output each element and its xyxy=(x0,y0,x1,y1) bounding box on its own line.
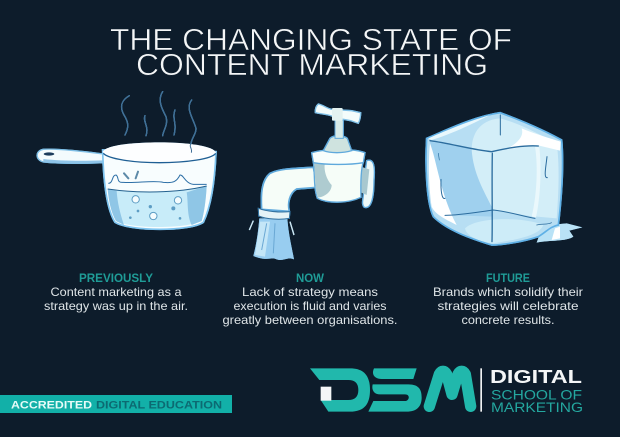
bubbles xyxy=(132,196,182,220)
water xyxy=(108,186,207,227)
accreditation banner xyxy=(0,395,232,413)
caption: now: execution is fluid and varies xyxy=(234,300,387,313)
spout band xyxy=(258,208,290,219)
caption: previously: strategy was up in the air. xyxy=(44,300,188,313)
caption: future xyxy=(433,272,583,327)
handle xyxy=(37,149,103,163)
tap handle xyxy=(315,104,361,123)
accreditation banner: DIGITAL EDUCATION xyxy=(96,400,222,412)
caption: future: FUTURE xyxy=(486,272,530,285)
caption: now: Lack of strategy means xyxy=(242,286,378,299)
spout xyxy=(261,167,317,211)
icon: tap xyxy=(249,104,374,260)
title xyxy=(110,22,512,82)
caption: previously: PREVIOUSLY xyxy=(79,272,153,285)
pot body xyxy=(103,150,216,229)
cube body xyxy=(426,113,563,245)
logo mark xyxy=(310,368,471,412)
puddle xyxy=(537,223,582,243)
logo wordmark: DIGITAL xyxy=(490,366,582,387)
logo wordmark: MARKETING xyxy=(491,399,583,415)
caption: future: concrete results. xyxy=(462,314,554,327)
icon: boiling pot xyxy=(37,92,216,229)
stem xyxy=(335,120,343,138)
caption: future: strategies will celebrate xyxy=(438,300,578,313)
rim xyxy=(103,142,216,163)
icon: ice cube xyxy=(426,113,582,245)
accreditation banner: ACCREDITED xyxy=(11,400,92,412)
caption: previously: Content marketing as a xyxy=(50,286,182,299)
caption: now xyxy=(222,272,398,327)
back flange xyxy=(363,160,374,208)
steam xyxy=(122,92,196,152)
cube faces xyxy=(430,142,493,217)
title: CONTENT MARKETING xyxy=(136,47,488,82)
logo wordmark: SCHOOL OF xyxy=(491,386,582,402)
caption: now: greatly between organisations. xyxy=(222,314,398,327)
caption: now: NOW xyxy=(296,272,324,285)
caption: previously xyxy=(44,272,188,313)
logo: DSM xyxy=(310,368,482,412)
water stream xyxy=(253,218,294,260)
collar xyxy=(312,149,365,164)
title: THE CHANGING STATE OF xyxy=(110,22,512,57)
tap body xyxy=(313,162,363,202)
cube edges xyxy=(430,115,552,242)
caption: future: Brands which solidify their xyxy=(433,286,583,299)
logo wordmark xyxy=(490,366,583,415)
